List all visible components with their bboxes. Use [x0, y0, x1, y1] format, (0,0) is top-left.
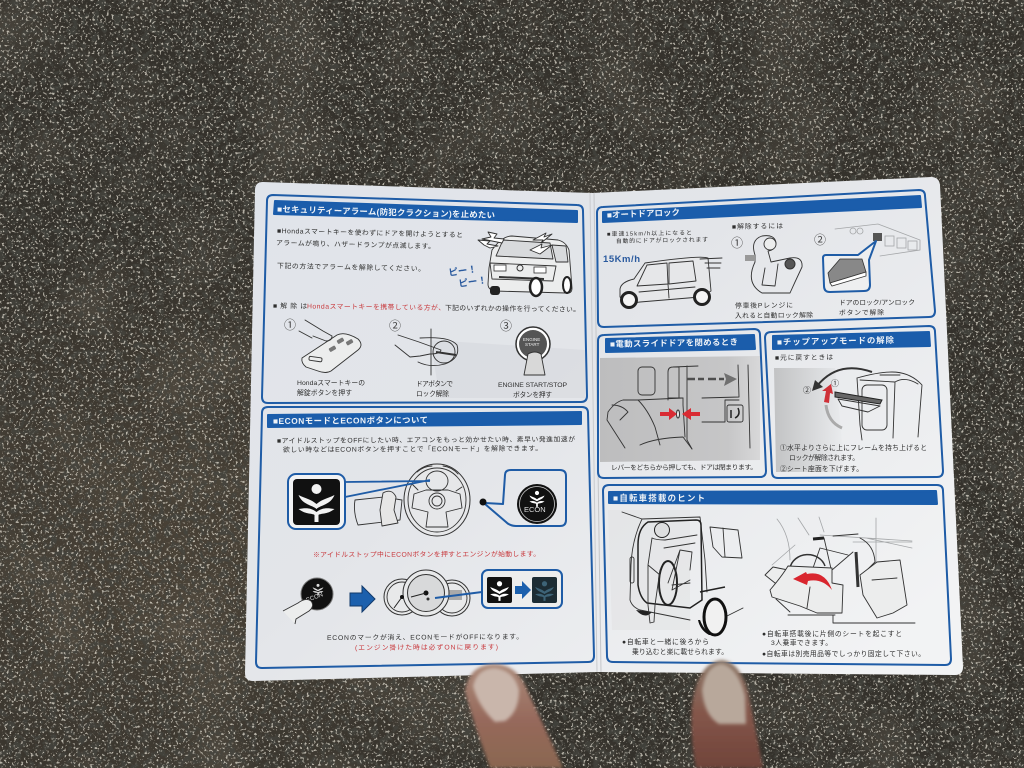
panel: power slide door [598, 329, 766, 478]
step 3: engine start button: START [525, 342, 540, 347]
diagram: loading bike into rear door: 乗り込むと楽に載せられます。 [632, 647, 728, 656]
heading: security alarm [274, 201, 577, 222]
text: alarm intro [276, 226, 463, 273]
text: alarm intro: アラームが鳴り、ハザードランプが点滅します。 [276, 238, 435, 251]
icon: instrument cluster [384, 570, 470, 616]
heading: auto door lock: ■オートドアロック [607, 207, 680, 220]
label: speed: 15Km/h [603, 254, 640, 265]
step 2: door lock button: ボタンで解除 [839, 308, 884, 317]
text: lever note: レバーをどちらから押しても、ドアは閉まります。 [611, 462, 757, 472]
step 1: shift lever [731, 236, 813, 320]
diagram: door lever [607, 365, 750, 449]
step 1: shift lever: 入れると自動ロック解除 [735, 310, 813, 320]
step 2: door button [389, 319, 458, 398]
step 3: engine start button: ボタンを押す [513, 390, 552, 399]
text: tip-up steps: ②シート座面を下げます。 [780, 464, 863, 473]
icon: car with alarm [478, 232, 572, 296]
diagram: loading bike into rear door [622, 512, 743, 656]
diagram: seat frame [803, 368, 922, 440]
text: lock explanation: 自動的にドアがロックされます [616, 235, 708, 245]
arrow: fold arc [812, 368, 872, 391]
callout: ECON button [480, 470, 566, 526]
heading: power slide door [606, 335, 755, 352]
text: cancel instruction: 下記のいずれかの操作を行ってください。 [445, 303, 580, 314]
step 3: engine start button: ENGINE [523, 337, 540, 342]
finger: right [692, 660, 763, 768]
heading: tip-up mode [773, 332, 930, 349]
step 2: door lock button: ドアのロック/アンロック [839, 299, 915, 307]
arrow: red seat folding [793, 572, 832, 590]
arrow: red lift [822, 384, 833, 403]
folded card [245, 177, 963, 681]
label: to release: ■解除するには [732, 221, 783, 231]
text: alarm intro: 下記の方法でアラームを解除してください。 [277, 261, 425, 273]
heading: security alarm: ■セキュリティーアラーム(防犯クラクション)を止めたい [277, 204, 495, 220]
text: lock explanation [607, 229, 708, 245]
arrow: red press left [660, 408, 677, 420]
step 2: door button: ② [389, 319, 401, 333]
diagram: steering wheel with ECON indicators [288, 464, 566, 536]
heading: ECON [268, 412, 581, 427]
text: cancel instruction: Hondaスマートキーを携帯している方が、 [307, 301, 445, 312]
step 2: door lock button [814, 224, 920, 317]
panel: bicycle loading [603, 485, 951, 665]
step 1: shift lever: ① [731, 236, 743, 250]
arrow: red press right [682, 408, 700, 420]
step 3: engine start button: ENGINE START/STOP [498, 382, 567, 389]
diagram: loading bike into rear door: ●自転車と一緒に後ろから [622, 637, 709, 646]
panel: security alarm [262, 195, 587, 403]
step 2: door button: ロック解除 [416, 389, 449, 398]
diagram: bike inside vehicle with folded seats: ●自転車は別売用品等でしっかり固定して下さい。 [762, 649, 925, 658]
text: tip-up steps: ①水平よりさらに上にフレームを持ち上げると [780, 443, 927, 452]
arrow: blue [350, 586, 375, 612]
heading: power slide door: ■電動スライドドアを閉めるとき [610, 337, 738, 349]
label: beep beep [448, 264, 488, 290]
step 1: smart key: Hondaスマートキーの [297, 379, 365, 387]
step 3: engine start button: ③ [500, 319, 512, 333]
text: alarm intro: ■Hondaスマートキーを使わずにドアを開けようとすると [277, 226, 463, 239]
callout: ECON indicator [288, 474, 345, 529]
text: tip-up steps: ロックが解除されます。 [789, 453, 859, 462]
heading: auto door lock [603, 196, 921, 222]
icon: side view car [620, 257, 722, 308]
arrow: close direction [687, 373, 737, 386]
text: ECON off result: (エンジン掛けた時は必ずONに戻ります) [355, 642, 498, 652]
text: tip-up steps [780, 443, 927, 473]
callout: ECON button: ECON [524, 505, 546, 514]
text: red note: ※アイドルストップ中にECONボタンを押すとエンジンが始動します。 [313, 549, 540, 559]
panel: auto door lock [597, 190, 935, 327]
diagram: bike inside vehicle with folded seats [762, 517, 925, 658]
icon: finger pressing ECON: ECON [306, 592, 324, 604]
icon: finger pressing ECON [283, 578, 333, 624]
diagram: bike inside vehicle with folded seats: 3人乗車できます。 [771, 638, 832, 647]
step 2: door lock button: ② [814, 233, 826, 247]
text: ECON intro: ■アイドルストップをOFFにしたい時、エアコンをもっと効かせたい時、素早い発進加速が [277, 434, 575, 445]
label: beep beep: ピー！ [458, 275, 488, 290]
diagram: seat frame: ① [831, 379, 839, 388]
step 1: shift lever: 停車後Pレンジに [735, 300, 793, 310]
finger: left [465, 664, 563, 768]
step 1: smart key [284, 318, 365, 397]
text: cancel instruction: ■解除は [273, 301, 307, 310]
text: ECON intro: 欲しい時などはECONボタンを押すことで「ECONモード」を解除できます。 [283, 444, 542, 454]
text: lock explanation: ■車速15km/h以上になると [607, 229, 692, 238]
text: cancel instruction [273, 301, 580, 314]
step 1: smart key: ① [284, 318, 296, 332]
label: beep beep: ピー！ [448, 264, 478, 279]
text: ECON off result [327, 632, 523, 652]
text: ECON intro [277, 434, 575, 454]
heading: tip-up mode: ■チップアップモードの解除 [777, 335, 895, 347]
callout: ECON indicator turning off [435, 570, 562, 608]
diagram: seat frame: ② [803, 386, 811, 395]
text: ECON off result: ECONのマークが消え、ECONモードがOFFになります。 [327, 632, 523, 642]
heading: ECON: ■ECONモードとECONボタンについて [273, 415, 428, 426]
text: restore: ■元に戻すときは [775, 353, 833, 362]
step 1: smart key: 解錠ボタンを押す [297, 388, 352, 397]
diagram: bike inside vehicle with folded seats: ●自転車搭載後に片側のシートを起こすと [762, 629, 902, 638]
heading: bicycle loading: ■自転車搭載のヒント [613, 493, 705, 503]
heading: bicycle loading [609, 491, 937, 504]
step 3: engine start button [498, 319, 567, 399]
panel: ECON mode [256, 407, 594, 668]
step 2: door button: ドアボタンで [416, 379, 453, 388]
panel: tip-up mode [765, 326, 943, 478]
